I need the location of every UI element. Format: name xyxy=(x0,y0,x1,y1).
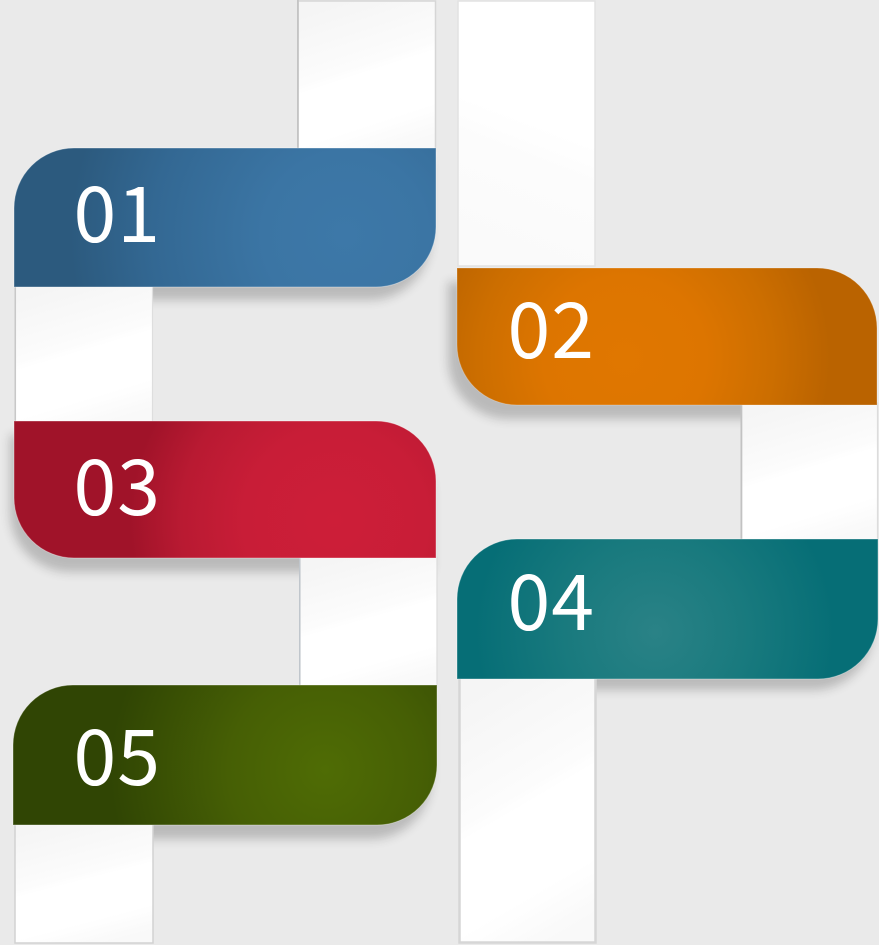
number 02: 02 xyxy=(508,270,595,381)
number 03: 03 xyxy=(74,427,161,538)
paper strip: between 01 and 03 xyxy=(14,285,152,423)
paper strip: top left xyxy=(297,0,436,151)
banner 03 xyxy=(14,421,436,558)
paper strip: bottom left xyxy=(15,823,153,943)
number 05: 05 xyxy=(74,697,161,808)
paper strip: top right xyxy=(458,1,595,266)
number 04: 04 xyxy=(508,542,595,653)
banner 05 xyxy=(13,685,437,825)
banner 01 xyxy=(14,148,436,287)
banner 04 xyxy=(457,539,878,679)
banner 02 xyxy=(457,268,877,405)
banner drop shadows xyxy=(5,242,878,844)
number 01: 01 xyxy=(74,154,161,265)
paper strip: between 03 and 05 xyxy=(299,557,437,687)
paper strip: between 02 and 04 xyxy=(740,403,878,540)
paper strip: bottom centre xyxy=(460,677,596,942)
